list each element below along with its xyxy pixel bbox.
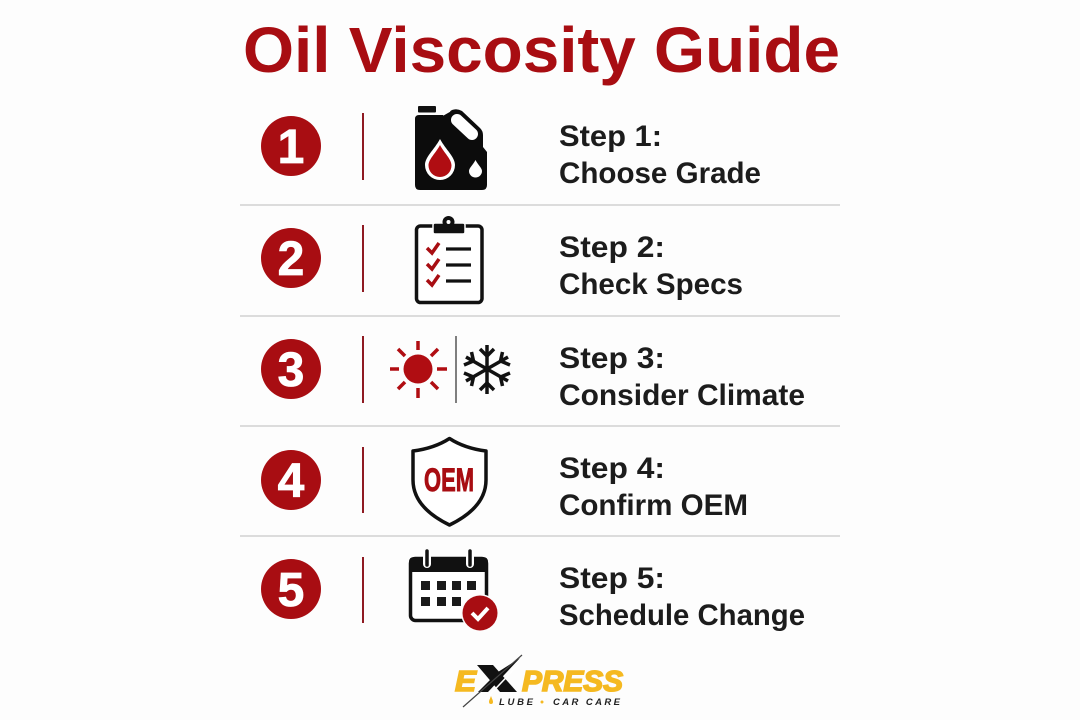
logo: Express Lube + Car Care: CAR CARE bbox=[553, 697, 621, 708]
step 4 label: Confirm OEM bbox=[559, 489, 748, 522]
logo: Express Lube + Car Care bbox=[455, 655, 624, 708]
icon: OEM shield: OEM bbox=[424, 462, 474, 498]
step 1 label: Step 1: bbox=[559, 120, 662, 153]
step 3 row bbox=[261, 336, 805, 412]
number badge 3 bbox=[261, 339, 321, 399]
step 1 label: Choose Grade bbox=[559, 157, 761, 190]
step 4 label bbox=[559, 452, 748, 522]
step 3 label: Step 3: bbox=[559, 342, 665, 375]
number badge 4: 4 bbox=[278, 455, 305, 508]
logo: Express Lube + Car Care: E bbox=[455, 666, 478, 698]
step 3 label bbox=[559, 342, 805, 412]
step 4 label: Step 4: bbox=[559, 452, 665, 485]
number badge 5 bbox=[261, 559, 321, 619]
icon: clipboard checklist bbox=[416, 216, 482, 302]
icon: sun bbox=[390, 341, 447, 398]
number badge 2 bbox=[261, 228, 321, 288]
step 5 label bbox=[559, 562, 805, 632]
step 2 row bbox=[261, 216, 743, 302]
number badge 1 bbox=[261, 116, 321, 176]
step 5 label: Step 5: bbox=[559, 562, 665, 595]
logo: Express Lube + Car Care: LUBE bbox=[499, 697, 534, 708]
number badge 2: 2 bbox=[278, 233, 304, 286]
icon: calendar with check bbox=[409, 551, 499, 632]
number badge 1: 1 bbox=[278, 121, 304, 174]
step 2 label bbox=[559, 231, 743, 301]
step 2 label: Check Specs bbox=[559, 268, 743, 301]
step 5 label: Schedule Change bbox=[559, 599, 805, 632]
step 1 row bbox=[261, 106, 761, 190]
step 1 label bbox=[559, 120, 761, 190]
title: Oil Viscosity Guide bbox=[243, 14, 840, 86]
step 4 row bbox=[261, 438, 748, 525]
icon: snowflake bbox=[464, 345, 510, 394]
step 2 label: Step 2: bbox=[559, 231, 665, 264]
number badge 4 bbox=[261, 450, 321, 510]
step 5 row bbox=[261, 551, 805, 632]
icon: OEM shield bbox=[413, 438, 486, 525]
icon: oil jug bbox=[415, 106, 487, 190]
number badge 3: 3 bbox=[278, 344, 304, 397]
logo: Express Lube + Car Care: PRESS bbox=[522, 666, 624, 698]
number badge 5: 5 bbox=[278, 564, 304, 617]
step 3 label: Consider Climate bbox=[559, 379, 805, 412]
